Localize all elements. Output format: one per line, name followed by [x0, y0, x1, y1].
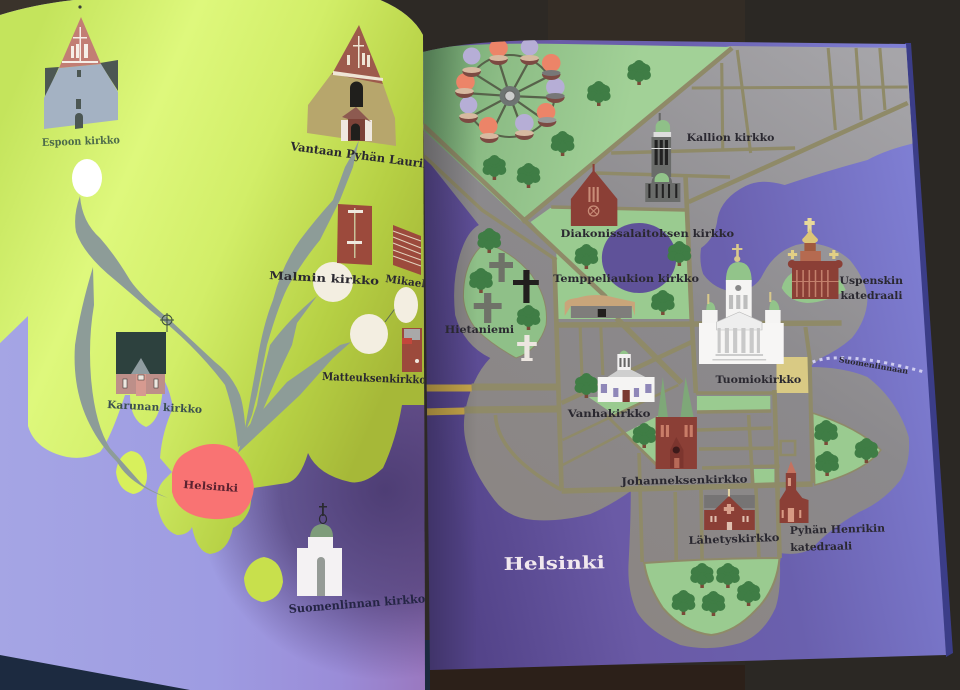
sea shadow near the spine	[190, 300, 430, 690]
city land mass	[423, 46, 915, 648]
church: Kallion kirkko	[645, 113, 680, 202]
circles: northern churches	[313, 262, 418, 354]
church: Pyhän Henrikin katedraali	[780, 461, 809, 523]
label: Uspenskin katedraali: katedraali	[841, 289, 903, 302]
label: Diakonissalaitoksen kirkko: Diakonissalaitoksen kirkko	[561, 227, 734, 240]
church: Vanhakirkko	[598, 350, 655, 402]
label: Uspenskin katedraali: Uspenskin	[840, 274, 903, 287]
islands	[116, 451, 283, 602]
church: Matteuksenkirkko	[402, 328, 422, 372]
church: Temppeliaukion kirkko	[565, 295, 635, 318]
label: Temppeliaukion kirkko: Temppeliaukion kirkko	[553, 272, 699, 285]
label: Matteuksenkirkko: Matteuksenkirkko	[322, 370, 426, 387]
label: Pyhän Henrikin katedraali: Pyhän Henrikin	[790, 522, 885, 537]
label: Pyhän Henrikin katedraali: katedraali	[790, 540, 852, 554]
Hietaniemi cemetery green	[463, 243, 547, 358]
pond	[602, 223, 676, 293]
gutter shadow	[423, 44, 469, 670]
label: Helsinki marker: Helsinki	[183, 479, 239, 495]
route: Karuna to Helsinki	[75, 267, 168, 498]
route ribbons	[75, 140, 359, 498]
church: Vantaan Pyhän Laurin kirkko	[307, 25, 396, 146]
ferry route to Suomenlinna	[813, 358, 924, 372]
label: Johanneksenkirkko: Johanneksenkirkko	[620, 473, 748, 488]
label: Suomenlinnaan: Suomenlinnaan	[838, 355, 909, 376]
label: Suomenlinnan kirkko: Suomenlinnan kirkko	[288, 591, 426, 616]
Helsinki red blob	[172, 444, 254, 519]
green squares and triangles	[588, 357, 881, 635]
label: Espoon kirkko: Espoon kirkko	[42, 134, 120, 149]
circle: Espoo	[72, 159, 102, 197]
church: Espoon kirkko	[44, 5, 118, 129]
lime land	[0, 0, 430, 554]
label: Vantaan Pyhän Laurin: Vantaan Pyhän Laurin	[289, 139, 433, 172]
church: Johanneksenkirkko	[656, 377, 697, 469]
church: Suomenlinnan kirkko	[297, 503, 342, 596]
sea	[410, 38, 960, 678]
church: Diakonissalaitoksen kirkko	[571, 164, 617, 226]
route: Malmi to Helsinki	[243, 296, 317, 445]
route: Matteus to Helsinki	[238, 342, 351, 453]
map labels	[445, 131, 909, 575]
route: Vantaa to Helsinki	[240, 140, 359, 445]
label: Karunan kirkko: Karunan kirkko	[107, 399, 202, 416]
label: Malmin kirkko: Malmin kirkko	[269, 269, 379, 288]
panel: right page Helsinki map	[410, 38, 960, 678]
label: Kallion kirkko: Kallion kirkko	[687, 131, 774, 144]
church: Tuomiokirkko	[699, 244, 784, 364]
route: Espoo to Helsinki	[75, 196, 246, 447]
church: Uspenskin katedraali	[788, 218, 843, 299]
church: Mikaelin kirkko	[393, 225, 421, 275]
label: Tuomiokirkko: Tuomiokirkko	[716, 373, 801, 386]
panel: left page regional map	[0, 0, 438, 690]
street network	[421, 48, 908, 562]
lilac sea	[0, 0, 428, 690]
park: amusement area	[418, 44, 732, 222]
church: Karunan kirkko	[116, 313, 174, 396]
Hietaniemi crosses	[474, 253, 539, 361]
church: Lähetyskirkko	[704, 489, 755, 530]
map title: Helsinki: Helsinki	[503, 553, 605, 575]
Uspenski green	[782, 273, 846, 303]
label: Lähetyskirkko: Lähetyskirkko	[688, 531, 780, 547]
church: Malmin kirkko	[337, 204, 372, 265]
label: Mikaelin kirkko: Mikaelin	[385, 273, 438, 292]
ferris wheel	[455, 38, 565, 143]
label: Hietaniemi: Hietaniemi	[445, 323, 514, 336]
right page back cover edge	[905, 43, 953, 657]
trees	[469, 60, 878, 616]
park: temple square	[531, 208, 691, 319]
label: Vanhakirkko: Vanhakirkko	[567, 407, 650, 420]
